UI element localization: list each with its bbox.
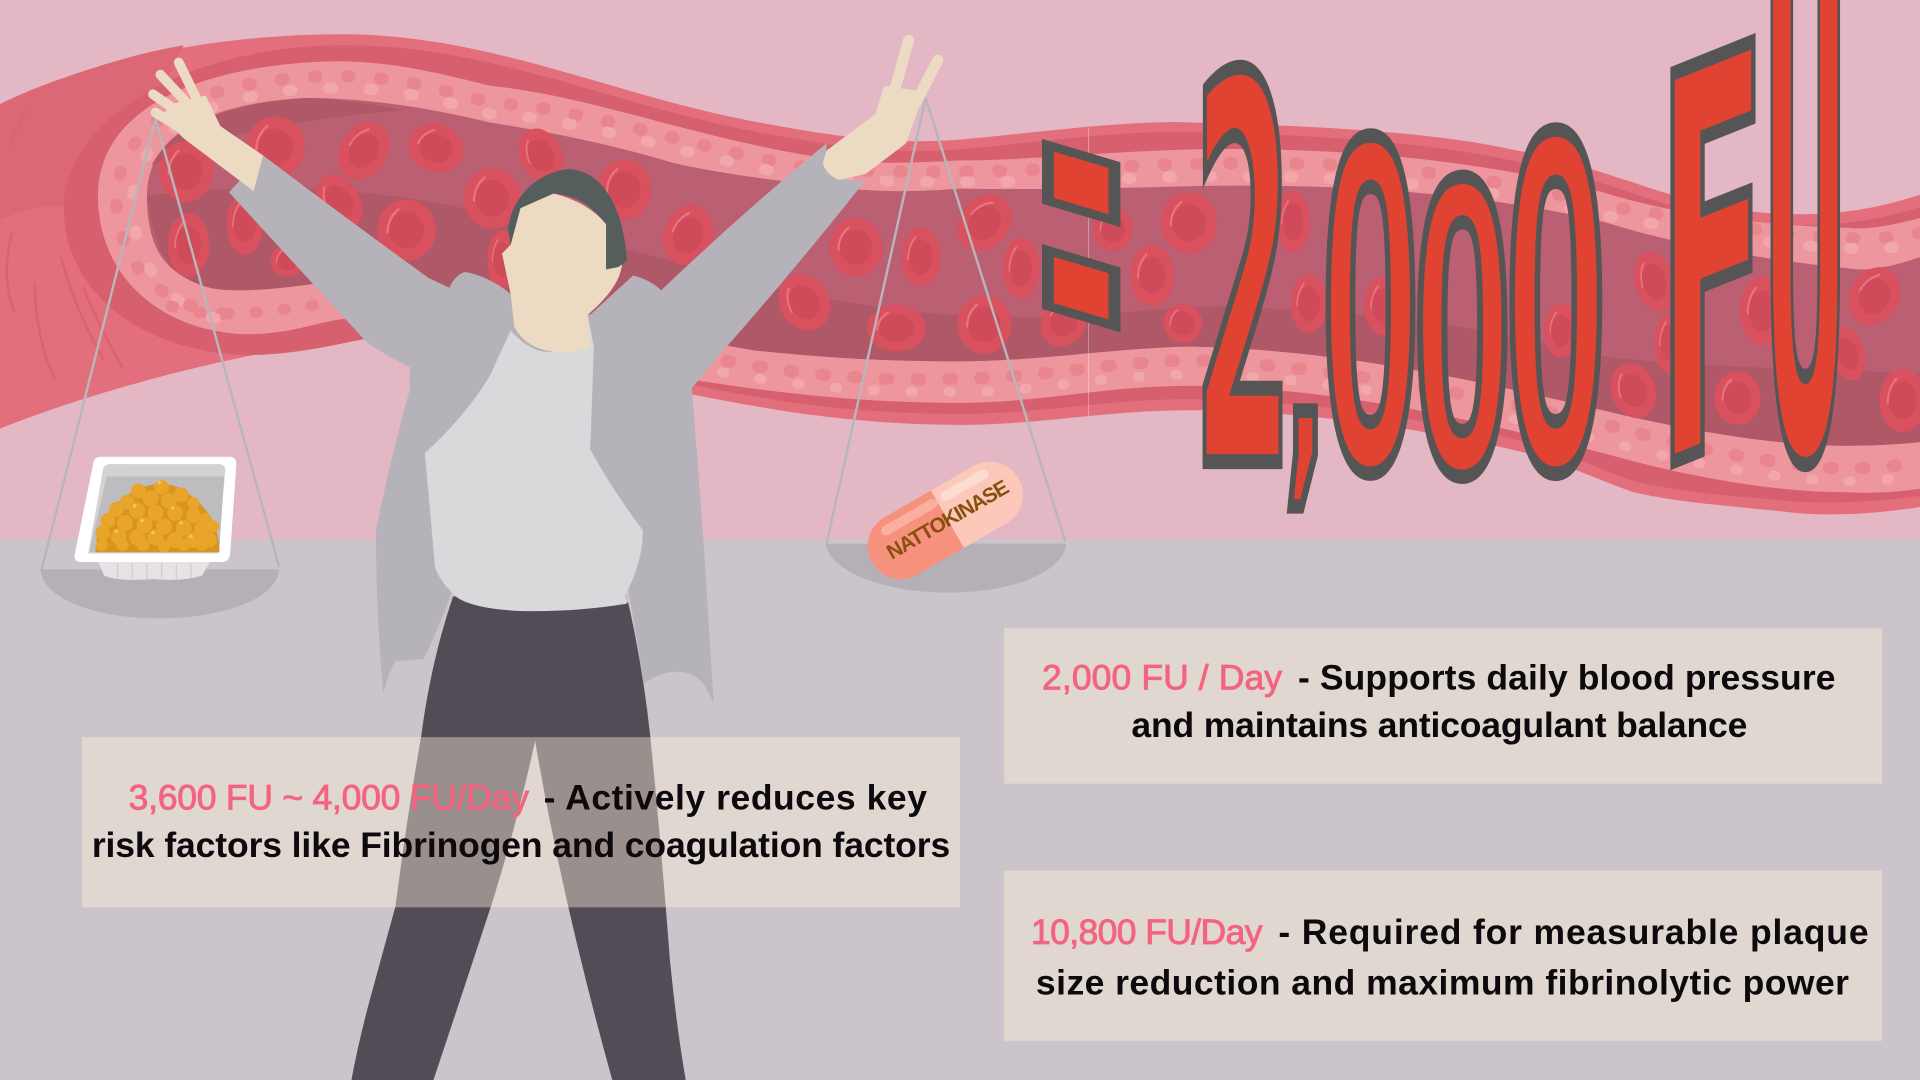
- big heading: 2,000 FU: :: [1006, 21, 1157, 408]
- left scale: strings: [42, 119, 279, 569]
- person: jacket: [229, 143, 866, 704]
- info panel: 2,000 FU per day: and maintains anticoagulant balance: [1131, 705, 1747, 745]
- background: pink wall: [0, 0, 1920, 540]
- big heading: 2,000 FU: 0: [1321, 38, 1420, 571]
- right scale pan: [825, 544, 1067, 593]
- natto beans: [96, 480, 219, 552]
- person: trousers: [351, 596, 686, 1080]
- info panel: 2,000 FU per day: [1004, 628, 1882, 784]
- big heading: 2,000 FU: 0: [1413, 89, 1512, 563]
- info panel: 10,800 FU per day: - Required for measurable plaque: [1278, 912, 1869, 952]
- big heading: 2,000 FU: [1006, 0, 1849, 606]
- big heading: 2,000 FU: ,: [1284, 197, 1326, 534]
- info panel: 10,800 FU per day: 10,800 FU/Day: [1031, 912, 1263, 952]
- person: hair: [508, 169, 627, 269]
- info panel: 10,800 FU per day: size reduction and maximum fibrinolytic power: [1036, 962, 1849, 1002]
- background: grey floor: [0, 539, 1920, 1080]
- person: left hand: [153, 62, 263, 191]
- decorative fat blobs: [116, 76, 1920, 481]
- info panel: 2,000 FU per day: - Supports daily blood pressure: [1298, 657, 1836, 697]
- person: [153, 40, 938, 1080]
- info panel: 3,600 to 4,000 FU per day: - Actively reduces key: [544, 777, 927, 817]
- vessel lumen: [147, 98, 1920, 446]
- big heading: 2,000 FU: 0: [1505, 28, 1607, 572]
- person: right hand: [823, 40, 938, 180]
- info panel: 2,000 FU per day: 2,000 FU / Day: [1042, 657, 1282, 697]
- left scale pan: [40, 569, 279, 618]
- person: sweater: [425, 316, 643, 611]
- info panel: 3,600 to 4,000 FU per day: 3,600 FU ~ 4,000 FU/Day: [129, 777, 529, 817]
- capsule label: NATTOKINASE: [883, 476, 1013, 564]
- right scale: strings: [827, 98, 1065, 544]
- info panel: 3,600 to 4,000 FU per day: [82, 737, 960, 907]
- blood vessel: [0, 34, 1920, 514]
- info panel: 3,600 to 4,000 FU per day: risk factors like Fibrinogen and coagulation factors: [92, 825, 950, 865]
- info panel: 10,800 FU per day: [1004, 871, 1882, 1041]
- person: neck and face: [502, 193, 622, 353]
- red blood cells: [159, 112, 1920, 432]
- nattokinase capsule: [856, 450, 1035, 591]
- natto tray: [75, 457, 236, 580]
